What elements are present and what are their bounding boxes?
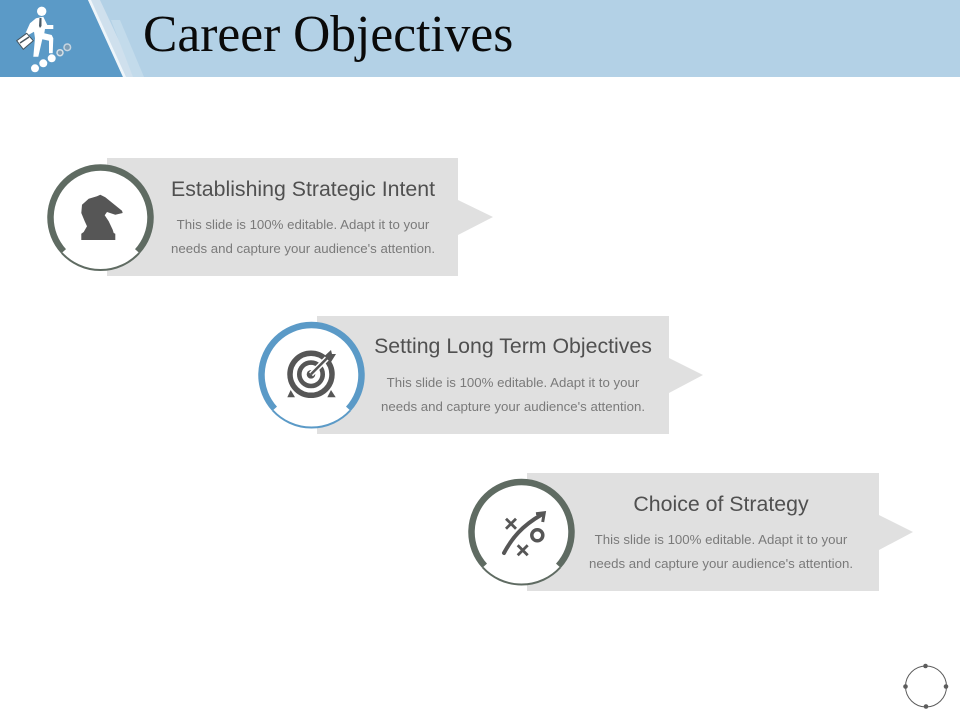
text 2 [381,375,645,414]
panel 2 [317,316,703,434]
ring 3 [468,479,574,585]
text 1: This slide is 100% editable. Adapt it to your [177,217,429,232]
heading 2: Setting Long Term Objectives [374,334,652,358]
icon: chess knight [81,195,123,240]
ring 1 [48,164,154,270]
icon: strategy play [504,513,544,555]
heading 3: Choice of Strategy [633,492,809,516]
text 1: needs and capture your audience's attention. [171,241,435,256]
text 2: needs and capture your audience's attention. [381,399,645,414]
heading 1: Establishing Strategic Intent [171,177,435,201]
panel 3 [527,473,913,591]
text 2: This slide is 100% editable. Adapt it to your [387,375,639,390]
header band [0,0,960,77]
icon: circle with four dots [903,664,948,709]
panel 1 [107,158,493,276]
title: Career Objectives [143,6,513,63]
text 3: needs and capture your audience's attention. [589,556,853,571]
text 3 [589,532,853,571]
ring 2 [258,322,364,428]
text 3: This slide is 100% editable. Adapt it to your [595,532,847,547]
icon: target with arrow [287,350,336,397]
icon: businessman climbing steps [17,7,71,72]
text 1 [171,217,435,256]
